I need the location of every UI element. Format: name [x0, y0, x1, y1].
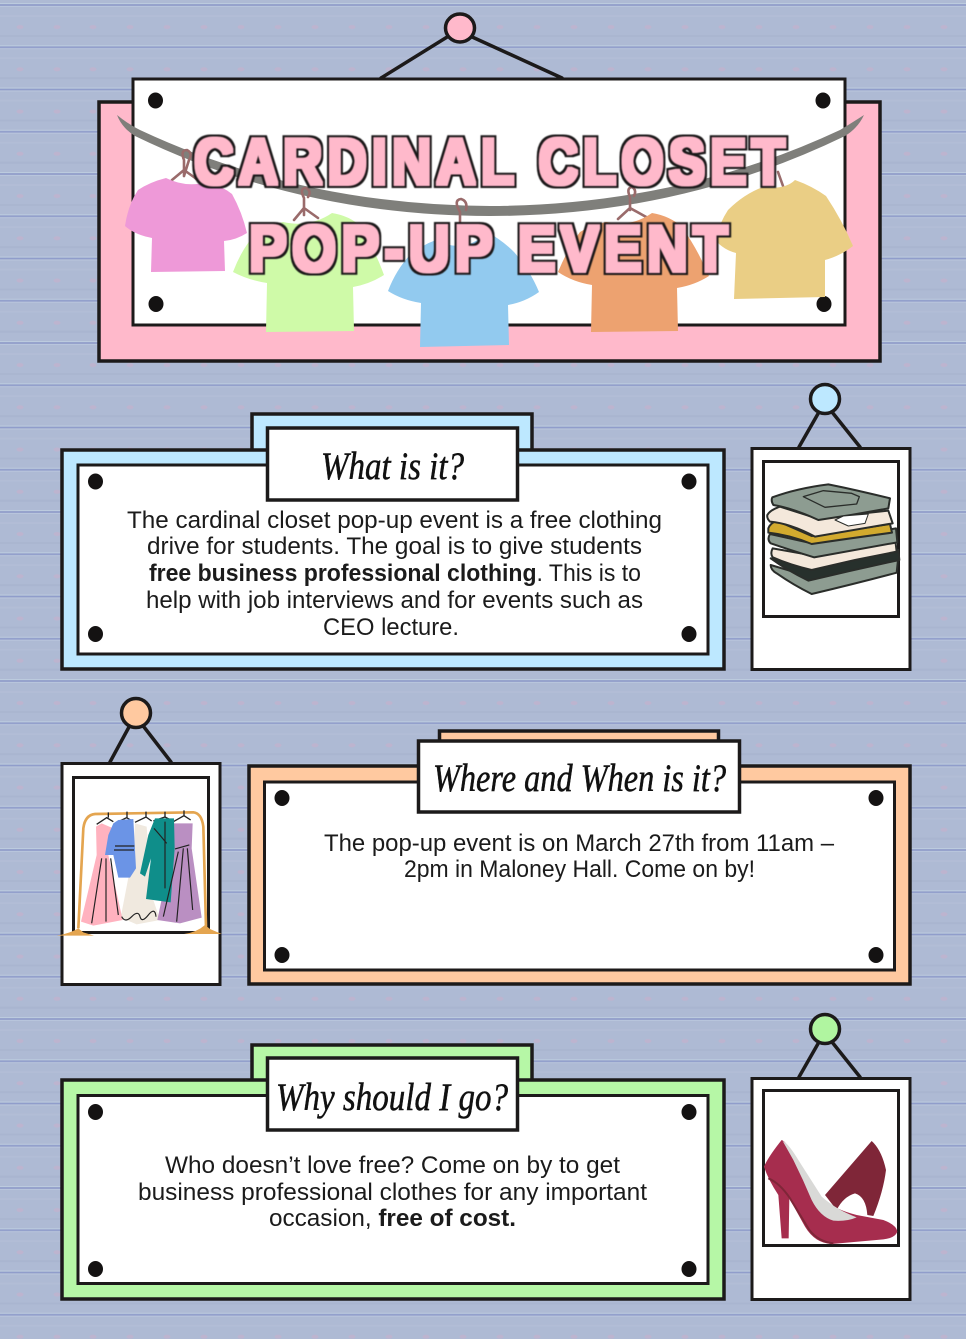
heading: Why should I go? [276, 1076, 508, 1119]
body text: The cardinal closet pop-up event is a free clothing [127, 507, 662, 534]
body text [324, 830, 835, 883]
frame [752, 448, 910, 670]
corner pins [148, 92, 832, 312]
heading box [268, 1058, 518, 1130]
heading: Where and When is it? [433, 757, 726, 800]
body text: 2pm in Maloney Hall. Come on by! [404, 856, 755, 883]
body text: CEO lecture. [323, 614, 459, 641]
hanging wire [381, 34, 562, 78]
clothesline [117, 115, 864, 216]
hangers [172, 150, 783, 232]
corner pins [88, 1104, 696, 1277]
title: POP-UP EVENT [249, 212, 733, 285]
frame [752, 1078, 910, 1300]
panel face [264, 782, 894, 970]
body text: help with job interviews and for events such as [146, 587, 643, 614]
body text: business professional clothes for any important [138, 1179, 647, 1206]
heading box [268, 428, 518, 500]
panel: where and when [249, 731, 910, 984]
panel: what is it [62, 414, 724, 669]
body text: drive for students. The goal is to give students [147, 533, 642, 560]
icon: heels [764, 1140, 897, 1244]
heading: What is it? [321, 445, 464, 488]
photo border [764, 462, 898, 616]
hanging wire [799, 412, 860, 447]
shirt: yellow [715, 180, 853, 299]
tab backing [252, 1045, 532, 1105]
hanging wire [110, 727, 171, 762]
hanging wire [799, 1042, 860, 1077]
body text: occasion, free of cost. [269, 1205, 516, 1232]
sign backing [99, 102, 880, 361]
corner pins [88, 474, 696, 642]
shirt: orange [558, 213, 709, 332]
panel frame [62, 1080, 724, 1299]
icon: dress rack [57, 810, 222, 936]
sign face [133, 79, 845, 325]
heading box [418, 741, 740, 812]
shirt: green [233, 213, 384, 332]
panel face [78, 465, 708, 654]
pin: green [810, 1014, 840, 1044]
shirt: pink [125, 178, 247, 272]
photo border [74, 778, 208, 932]
tab backing [252, 414, 532, 474]
photo frame: folded clothes [752, 384, 910, 670]
body text: free business professional clothing. This is to [149, 560, 641, 587]
photo frame: red heels [752, 1014, 910, 1300]
panel: why should I go [62, 1045, 724, 1299]
pin: orange [122, 698, 150, 728]
frame [62, 764, 220, 984]
body text [138, 1152, 647, 1232]
title [194, 125, 790, 285]
body text: Who doesn’t love free? Come on by to get [165, 1152, 620, 1179]
corner pins [274, 790, 884, 963]
photo border [764, 1090, 898, 1246]
icon: stack of clothes [767, 484, 899, 594]
pin: blue [810, 384, 840, 414]
pin: pink [446, 14, 474, 42]
panel: title sign [99, 14, 880, 361]
shirt: blue [388, 232, 539, 347]
body text [127, 507, 662, 641]
photo frame: dress rack [57, 698, 222, 984]
body text: The pop-up event is on March 27th from 11am – [324, 830, 835, 857]
panel frame [249, 766, 910, 984]
tab backing [440, 731, 718, 781]
panel face [78, 1096, 708, 1284]
panel frame [62, 450, 724, 669]
title: CARDINAL CLOSET [194, 125, 790, 198]
